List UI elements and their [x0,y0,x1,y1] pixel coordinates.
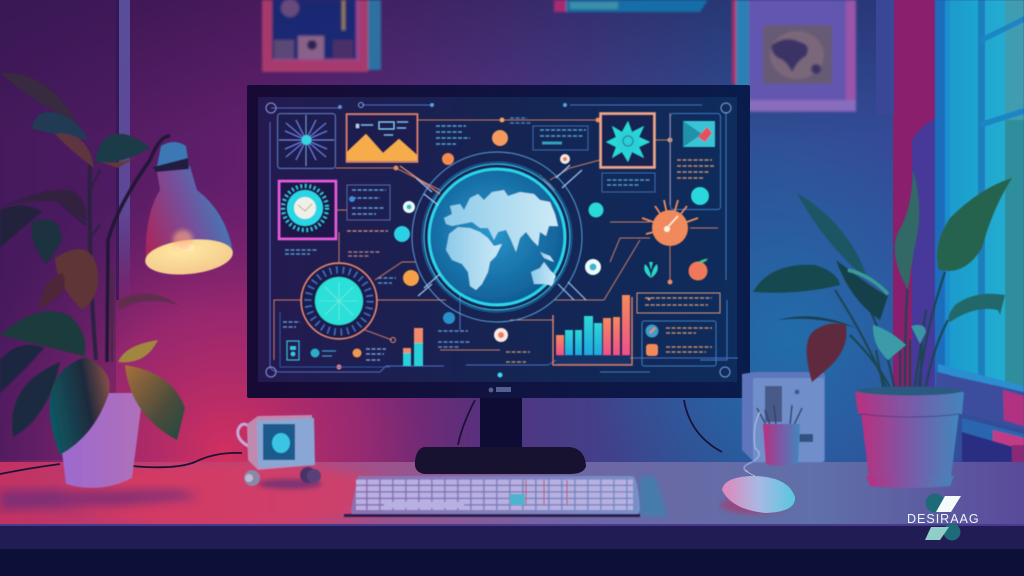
screen contents [266,102,738,378]
leaf [895,170,919,290]
plant leaf [0,73,78,124]
leaf [836,260,888,320]
pot: right [855,386,964,488]
image card panel [670,114,720,210]
orange foreground leaf [125,365,185,440]
large cyan dial [301,263,377,339]
logo: DESIRAAG: DESIRAAG [907,512,980,526]
left plant [0,73,185,488]
mouse [721,470,795,514]
text panel right [637,293,720,313]
keyboard [344,476,640,517]
icon: plant [644,262,658,278]
small circle nodes [336,102,709,378]
red leaf [807,323,847,382]
large foreground leaf [50,357,110,455]
window [935,0,1024,463]
picture frame: top right [732,0,856,112]
monitor [247,85,750,398]
leaf [937,178,1012,271]
cables [0,400,722,474]
icon: apple [688,259,708,280]
desk lamp [107,136,235,362]
olive leaf [118,340,158,362]
bar chart [553,295,632,365]
pot: left [58,393,143,488]
circuit lines [266,103,738,377]
bottom-left icon cards [280,312,390,367]
text card left [347,185,390,220]
mug robot [238,415,321,486]
right virus panel [600,114,654,168]
highlighted clock panel [279,181,336,239]
leaf [778,316,856,328]
leaf [797,193,868,280]
picture frame: top left [262,0,381,72]
globe [412,152,582,322]
mountain chart panel [346,114,418,162]
pen cup [744,405,802,472]
picture frame: top centre [554,0,708,12]
continents [444,190,558,290]
right plant [753,170,1012,488]
top-left sunburst panel [278,114,336,168]
radial connectors [400,165,586,300]
wall pillar near window [876,0,937,400]
desk [0,462,1024,576]
leaf [753,265,840,293]
logo: DESIRAAG [907,494,980,540]
pale teal leaf [873,325,906,360]
text card top right [533,126,655,192]
brand mark [489,387,511,392]
small bar chart [403,328,423,366]
info card right [642,321,716,366]
orange sun [642,200,698,246]
monitor stand [415,395,586,474]
device on desk [742,372,825,463]
leaf [948,294,1005,322]
pale teal leaf [911,325,926,344]
text lines [283,118,714,362]
